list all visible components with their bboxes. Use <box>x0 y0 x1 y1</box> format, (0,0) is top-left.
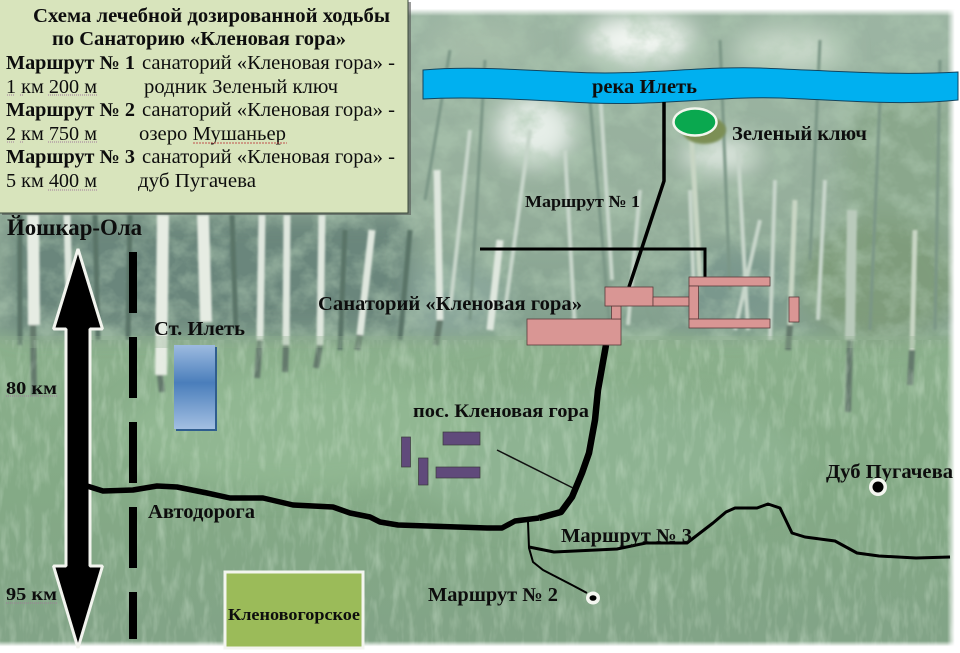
legend title <box>33 6 390 50</box>
pointer line to settlement <box>497 450 573 488</box>
route 1 line <box>629 102 664 287</box>
arrow: highway direction <box>54 249 102 648</box>
legend route 1: родник Зеленый ключ <box>144 77 338 98</box>
icon: station Ilet <box>174 345 217 431</box>
legend route 3: дуб Пугачева <box>138 171 256 192</box>
road: highway <box>87 486 539 528</box>
legend title: Схема лечебной дозированной ходьбы <box>33 6 390 27</box>
legend route 2 <box>6 100 395 145</box>
legend route 1: 1 км 200 м <box>6 77 97 98</box>
label: sanatorium: Санаторий «Кленовая гора» <box>318 294 582 315</box>
legend route 1: санаторий «Кленовая гора» - <box>142 53 395 74</box>
legend route 3: санаторий «Кленовая гора» - <box>142 147 395 168</box>
legend route 3: Маршрут № 3 <box>6 147 135 168</box>
label: 95 km: 95 км <box>6 584 57 604</box>
label: Green Spring: Зеленый ключ <box>732 124 867 145</box>
railway dashed line <box>129 252 137 639</box>
legend route 1 <box>6 53 395 98</box>
sanatorium buildings <box>527 277 799 345</box>
river Ilet <box>423 68 958 104</box>
panel: route legend <box>0 0 411 215</box>
road: access to sanatorium <box>539 345 606 518</box>
label: route 3: Маршрут № 3 <box>561 526 692 547</box>
legend route 3: 5 км 400 м <box>6 171 97 192</box>
marker: Lake Mushanyer <box>586 592 600 604</box>
legend route 2: Маршрут № 2 <box>6 100 135 121</box>
marker: Pugachev Oak <box>869 478 887 496</box>
legend route 1: Маршрут № 1 <box>6 53 135 74</box>
label: station: Ст. Илеть <box>154 319 245 340</box>
fence line <box>480 249 705 277</box>
box: Klenovogorskoe <box>225 572 363 648</box>
box: Klenovogorskoe: Кленовогорское <box>228 605 360 624</box>
label: route 1: Маршрут № 1 <box>525 192 640 211</box>
label: Klenovaya Gora settlement: пос. Кленовая гора <box>413 402 589 422</box>
label: Yoshkar-Ola: Йошкар-Ола <box>7 215 142 240</box>
legend route 2: санаторий «Кленовая гора» - <box>142 100 395 121</box>
legend title: по Санаторию «Кленовая гора» <box>52 29 346 50</box>
legend route 2: озеро Мушаньер <box>139 124 286 145</box>
label: highway: Автодорога <box>148 502 255 523</box>
label: Pugachev Oak: Дуб Пугачева <box>826 462 953 483</box>
route 2 line <box>528 522 587 593</box>
river Ilet: река Илеть <box>592 77 697 98</box>
settlement houses <box>402 432 480 485</box>
route 3 line <box>529 504 950 558</box>
legend route 3 <box>6 147 395 192</box>
label: 80 km: 80 км <box>6 378 57 398</box>
icon: Green Spring <box>674 108 726 144</box>
label: route 2: Маршрут № 2 <box>428 585 558 606</box>
legend route 2: 2 км 750 м <box>6 124 97 145</box>
